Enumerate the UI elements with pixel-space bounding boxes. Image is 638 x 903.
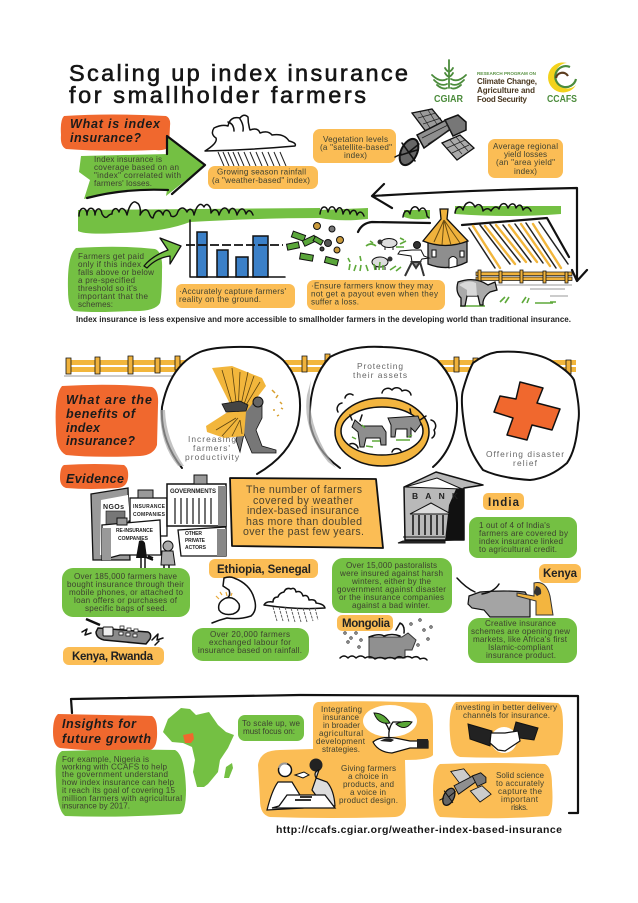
panel: priorities orange block: product design. <box>339 796 398 805</box>
callout: rainfall index: (a "weather-based" index) <box>212 176 310 185</box>
heading: evidence: Evidence <box>66 472 124 486</box>
panel: priorities orange block: Integrating <box>321 705 362 714</box>
label: Mongolia <box>337 615 393 631</box>
logo: research program text: RESEARCH PROGRAM ON <box>477 71 537 76</box>
panel: labour exchange: exchanged labour for <box>209 638 291 647</box>
panel: benefits heading: What are the <box>66 393 152 407</box>
panel: Kenya fact: insurance product. <box>486 651 556 660</box>
arrow: definition arrow with text: farmers' losses. <box>94 179 152 188</box>
link: url: http://ccafs.cgiar.org/weather-index-based-insurance <box>276 824 562 836</box>
panel: what is index insurance heading <box>61 114 170 151</box>
panel: Kenya fact: markets, like Africa's first <box>473 635 568 644</box>
illustration: farm scene <box>348 209 572 306</box>
callout: capture reality: reality on the ground. <box>179 295 261 304</box>
panel: priorities orange block: products, and <box>343 780 394 789</box>
callout: area yield index <box>488 139 563 178</box>
panel: benefits heading: index <box>66 421 101 435</box>
panel: farmers bought insurance <box>62 568 190 617</box>
callout: farmers doubled: index-based insurance <box>247 505 359 517</box>
label: Kenya, Rwanda <box>63 647 164 665</box>
bushes: green hedge band <box>78 202 561 234</box>
logo: research program text <box>477 71 537 104</box>
icon: yak in snow <box>340 619 432 660</box>
callout: ensure farmers know: ·Ensure farmers know they may <box>311 282 434 290</box>
panel: Mongolia fact: winters, either by the <box>351 577 431 586</box>
label: Mongolia: Mongolia <box>342 618 391 630</box>
callout: farmers doubled: The number of farmers <box>246 484 362 496</box>
panel: Nigeria example: the government understand <box>62 770 168 779</box>
building: re-insurance companies: RE-INSURANCE <box>116 528 154 534</box>
callout: area yield index: (an "area yield" <box>496 158 555 167</box>
logo: research program text: Climate Change, <box>477 77 537 86</box>
icon: bank: BANK <box>412 491 459 501</box>
panel: solid science: Solid science <box>496 771 544 780</box>
caption: cost statement: Index insurance is less expensive and more accessible to smallholder farmers in the developing world than traditional insurance. <box>76 315 571 324</box>
panel: Nigeria example: million farmers with agricultural <box>62 794 182 803</box>
panel: delivery channels: investing in better delivery <box>456 703 558 712</box>
panel: India fact: farmers are covered by <box>479 529 569 538</box>
panel: priorities orange block: in broader <box>323 721 360 730</box>
icon: red cross <box>494 382 560 440</box>
panel: threshold explanation: threshold so it's <box>78 284 137 293</box>
Nigeria highlight <box>183 733 194 743</box>
panel: India fact: 1 out of 4 of India's <box>479 521 550 530</box>
panel: solid science: risks. <box>511 803 528 812</box>
callout: capture reality <box>176 284 295 308</box>
logo: CGIAR <box>432 60 466 105</box>
icon: bank <box>398 472 483 543</box>
building: other private actors: PRIVATE <box>185 538 206 544</box>
callout: rainfall index <box>208 166 318 189</box>
logo: research program text: Food Security <box>477 95 528 104</box>
panel: benefits heading <box>56 385 158 457</box>
callout: to scale up: must focus on: <box>243 727 295 736</box>
icon: satellite small <box>440 769 491 807</box>
panel: farmers bought insurance: mobile phones, or attached to <box>69 588 183 597</box>
panel: Kenya fact: Creative insurance <box>485 619 556 628</box>
callout: vegetation index: index) <box>344 151 367 160</box>
icon: farmer carrying wheat <box>206 366 283 453</box>
building: governments: GOVERNMENTS <box>170 489 216 495</box>
icon: mobile phone <box>82 619 163 645</box>
logo: CCAFS <box>547 62 577 105</box>
callout: area yield index: yield losses <box>504 150 547 159</box>
icon: money <box>287 222 344 266</box>
heading: insights: Insights for <box>62 717 137 731</box>
panel: priorities orange block: agricultural <box>319 729 363 738</box>
bar chart: index threshold <box>186 220 285 277</box>
panel: Nigeria example: it reach its goal of covering 15 <box>62 786 175 795</box>
panel: Mongolia fact <box>332 558 452 613</box>
panel: farmers bought insurance: loan offers or purchases of <box>74 596 178 605</box>
panel: priorities orange block: insurance <box>323 713 359 722</box>
grass patches <box>348 238 556 306</box>
callout: to scale up <box>238 715 304 741</box>
panel: labour exchange: Over 20,000 farmers <box>210 630 290 639</box>
heading: insights: future growth <box>62 732 151 746</box>
label: India: India <box>488 497 520 509</box>
panel: Nigeria example: insurance by 2017. <box>62 802 130 810</box>
panel: labour exchange <box>192 628 309 661</box>
panel: threshold explanation: Farmers get paid <box>78 252 144 261</box>
panel: India fact <box>469 517 577 558</box>
icon: rain cloud <box>205 115 295 166</box>
logo: CGIAR: CGIAR <box>434 94 464 105</box>
callout: farmers doubled: has more than doubled <box>246 516 362 528</box>
building: insurance companies <box>130 490 167 536</box>
panel: farmers bought insurance: specific bags of seed. <box>85 604 167 613</box>
panel: protecting assets: Protecting <box>357 361 403 371</box>
panel: priorities orange block: development <box>316 737 366 746</box>
icon: crop rows <box>469 222 568 268</box>
illustration: institutions <box>91 475 226 570</box>
panel: India fact: to agricultural credit. <box>479 545 557 554</box>
icon: ox <box>468 591 530 617</box>
label: Kenya: Kenya <box>543 568 578 580</box>
heading: insights <box>53 714 157 751</box>
panel: threshold explanation: only if this index <box>78 260 141 269</box>
callout: ensure farmers know: not get a payout even when they <box>311 290 439 298</box>
panel: threshold explanation <box>68 247 162 312</box>
panel: Nigeria example: working with CCAFS to help <box>61 762 167 772</box>
panel: delivery channels: channels for insurance. <box>463 711 550 720</box>
arrow: definition arrow with text <box>79 136 205 199</box>
panel: disaster relief: relief <box>513 458 538 468</box>
title <box>69 60 408 108</box>
panel: Kenya fact <box>468 618 577 663</box>
panel: Mongolia fact: were insured against harsh <box>339 569 443 578</box>
icon: fence <box>470 270 572 296</box>
panel: farmers bought insurance: Over 185,000 farmers have <box>74 572 177 581</box>
panel: Mongolia fact: against a bad winter. <box>352 601 430 610</box>
building: insurance companies: COMPANIES <box>133 512 166 518</box>
panel: increasing productivity: Increasing <box>188 434 236 444</box>
panel: solid science: capture the <box>498 787 542 796</box>
building: insurance companies: INSURANCE <box>133 504 166 510</box>
building: re-insurance companies: COMPANIES <box>118 536 149 542</box>
panel: labour exchange: insurance based on rainfall. <box>198 646 302 655</box>
panel: Kenya fact: schemes are opening new <box>471 627 570 636</box>
callout: farmers doubled <box>230 478 383 548</box>
panel: disaster relief: Offering disaster <box>486 449 564 459</box>
panel: benefits heading: insurance? <box>66 434 135 448</box>
callout: vegetation index: Vegetation levels <box>323 135 388 144</box>
map: Africa with Nigeria <box>163 708 234 787</box>
panel: priorities orange block: strategies. <box>322 745 360 754</box>
building: NGOs: NGOs <box>103 504 124 511</box>
panel: India fact: index insurance linked <box>479 537 563 546</box>
icon: business handshake <box>136 540 175 570</box>
panel: increasing productivity: farmers' <box>193 443 230 453</box>
callout: area yield index: Average regional <box>493 142 558 151</box>
label: Kenya, Rwanda: Kenya, Rwanda <box>72 651 154 663</box>
label: Kenya <box>539 564 581 583</box>
panel: solid science: to accurately <box>496 779 545 788</box>
callout: farmers doubled: over the past few years. <box>243 526 364 538</box>
icon: farmer <box>398 242 429 276</box>
fence: divider between sections <box>64 354 576 376</box>
callout: capture reality: ·Accurately capture farmers' <box>179 287 286 296</box>
logo: research program text: Agriculture and <box>477 86 535 95</box>
panel: what is index insurance heading: insurance? <box>70 131 141 145</box>
callout: farmers doubled: covered by weather <box>253 495 353 507</box>
panel: threshold explanation: important that the <box>78 292 148 301</box>
icon: two people with map <box>267 758 335 810</box>
panel: priorities orange block <box>258 701 433 818</box>
heading: evidence <box>60 464 128 489</box>
frame line: future growth section <box>71 695 578 813</box>
panel: Nigeria example: For example, Nigeria is <box>62 755 149 764</box>
icon: seedling in hand <box>363 705 428 753</box>
panel: Nigeria example: how index insurance can help <box>62 778 174 787</box>
callout: ensure farmers know: suffer a loss. <box>311 298 359 306</box>
panel: Mongolia fact: government against disaster <box>337 585 446 594</box>
building: re-insurance companies <box>102 518 161 560</box>
title: for smallholder farmers <box>69 82 366 108</box>
panel: increasing productivity <box>160 347 300 474</box>
panel: disaster relief <box>462 352 579 480</box>
building: other private actors <box>178 527 226 556</box>
panel: solid science <box>433 763 552 818</box>
logo: CCAFS: CCAFS <box>547 94 577 105</box>
building: other private actors: OTHER <box>185 531 202 537</box>
icon: handshake <box>468 722 538 753</box>
icon: satellite <box>395 109 474 168</box>
label: Ethiopia, Senegal: Ethiopia, Senegal <box>217 564 311 576</box>
panel: priorities orange block: a voice in <box>350 788 386 797</box>
callout: to scale up: To scale up, we <box>242 719 300 728</box>
icon: rain cloud small <box>264 588 325 622</box>
panel: priorities orange block: a choice in <box>348 772 388 781</box>
label: Ethiopia, Senegal <box>209 559 318 578</box>
callout: rainfall index: Growing season rainfall <box>217 168 306 176</box>
callout: vegetation index: (a "satellite-based" <box>320 143 392 152</box>
icon: thatched hut <box>423 209 468 268</box>
panel: Kenya fact: Islamic-compliant <box>488 643 554 652</box>
building: other private actors: ACTORS <box>185 545 207 551</box>
callout: vegetation index <box>313 129 396 163</box>
icon: woman in headscarf <box>517 583 553 615</box>
panel: threshold explanation: falls above or below <box>78 268 154 277</box>
icon: flexed arm <box>212 577 255 623</box>
icon: sheep <box>372 238 397 270</box>
panel: solid science: important <box>501 795 539 804</box>
title: Scaling up index insurance <box>69 60 408 86</box>
panel: protecting assets: their assets <box>353 370 407 380</box>
icon: cattle corral <box>335 388 436 466</box>
panel: Nigeria example <box>56 750 186 817</box>
panel: priorities orange block: Giving farmers <box>341 764 396 773</box>
panel: Mongolia fact: or the insurance companies <box>339 593 444 602</box>
arrow: definition arrow with text: "index" correlated with <box>94 171 181 180</box>
panel: delivery channels <box>450 701 563 758</box>
label: India <box>483 493 524 510</box>
panel: benefits heading: benefits of <box>66 407 137 421</box>
panel: Mongolia fact: Over 15,000 pastoralists <box>346 561 437 570</box>
callout: ensure farmers know <box>307 280 445 310</box>
icon: cow <box>457 280 497 306</box>
arrow: small green arrow to chart <box>144 238 181 268</box>
callout: area yield index: index) <box>514 167 537 176</box>
panel: threshold explanation: a pre-specified <box>78 276 135 285</box>
arrow: definition arrow with text: coverage based on an <box>94 163 179 172</box>
panel: increasing productivity: productivity <box>185 452 240 462</box>
panel: threshold explanation: schemes: <box>78 300 113 309</box>
illustration: ox and herder <box>457 578 553 617</box>
arrow: large flow arrow <box>372 184 587 281</box>
panel: farmers bought insurance: bought insurance through their <box>67 580 184 589</box>
arrow: definition arrow with text: Index insurance is <box>94 155 162 164</box>
panel: what is index insurance heading: What is index <box>70 117 161 131</box>
panel: protecting assets <box>306 347 457 468</box>
